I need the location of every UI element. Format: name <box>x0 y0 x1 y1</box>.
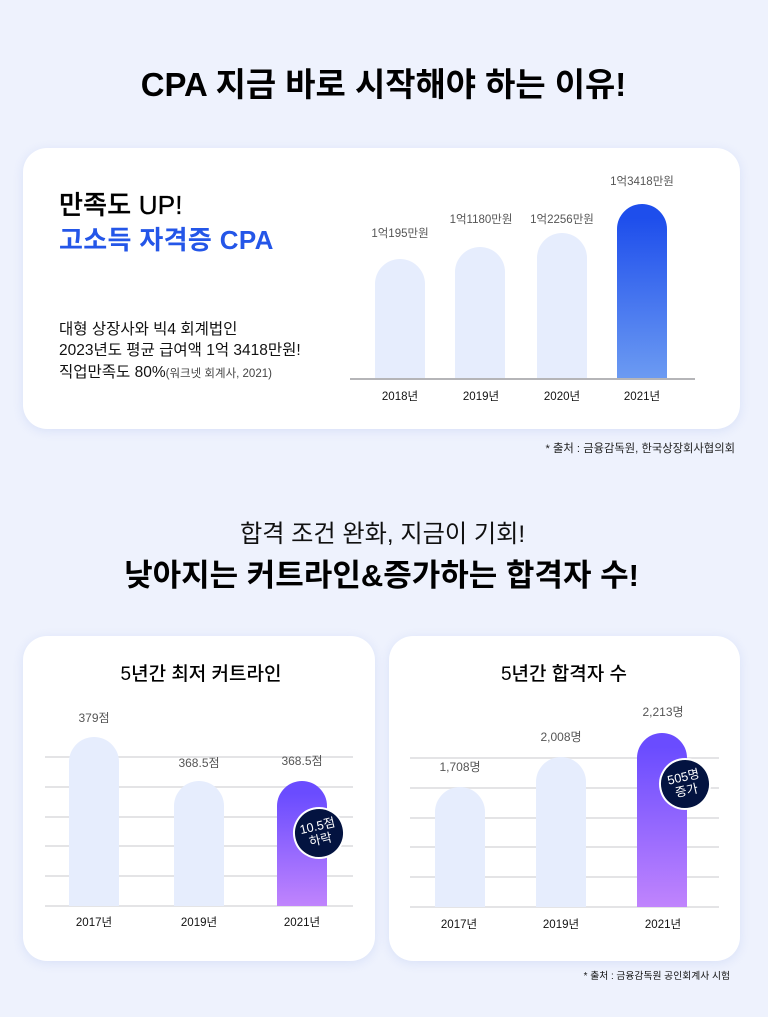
bar 2021 <box>637 733 687 907</box>
bar 2017 <box>69 737 119 906</box>
value 2019: 1억1180만원 <box>450 214 512 226</box>
year 2021: 2021년 <box>645 919 681 931</box>
year 2018: 2018년 <box>382 391 418 403</box>
year 2017: 2017년 <box>441 919 477 931</box>
bar 2018 <box>375 259 425 379</box>
year 2019: 2019년 <box>181 917 217 929</box>
value 2021: 368.5점 <box>281 754 323 768</box>
bar 2019 <box>174 781 224 906</box>
year 2019: 2019년 <box>463 391 499 403</box>
callout: 10.5 point drop <box>288 802 350 864</box>
value 2021: 1억3418만원 <box>610 176 674 188</box>
source note 1: * 출처 : 금융감독원, 한국상장회사협의회 <box>545 443 735 455</box>
section subheading: 합격 조건 완화, 지금이 기회! <box>240 521 525 548</box>
panel heading: 만족도 UP! <box>59 190 183 220</box>
bar 2019 <box>455 247 505 379</box>
value 2017: 1,708명 <box>439 760 481 774</box>
value 2017: 379점 <box>78 711 110 725</box>
bar 2019 <box>536 757 586 907</box>
panel: successful applicants <box>389 636 740 961</box>
source note 2: * 출처 : 금융감독원 공인회계사 시험 <box>584 971 730 982</box>
panel title: 5년간 최저 커트라인 <box>121 664 281 685</box>
bar 2021 <box>617 204 667 379</box>
main title: CPA 지금 바로 시작해야 하는 이유! <box>141 66 626 103</box>
value 2018: 1억195만원 <box>371 228 429 240</box>
description text: 직업만족도 80%(워크넷 회계사, 2021) <box>59 364 272 380</box>
year 2021: 2021년 <box>284 917 320 929</box>
year 2017: 2017년 <box>76 917 112 929</box>
description text <box>59 320 301 380</box>
bar 2021 <box>277 781 327 906</box>
value 2020: 1억2256만원 <box>530 214 594 226</box>
bar 2017 <box>435 787 485 907</box>
year 2020: 2020년 <box>544 391 580 403</box>
callout: 505 increase <box>654 753 716 815</box>
value 2021: 2,213명 <box>642 705 684 719</box>
bar 2020 <box>537 233 587 379</box>
panel: lowest cutline <box>23 636 375 961</box>
description text: 대형 상장사와 빅4 회계법인 <box>59 320 237 338</box>
callout: 505 increase: 505명 <box>666 767 701 788</box>
callout: 10.5 point drop: 하락 <box>308 830 333 849</box>
value 2019: 2,008명 <box>540 730 582 744</box>
year 2019: 2019년 <box>543 919 579 931</box>
bar chart: salary by year <box>350 175 695 403</box>
axis line <box>350 378 695 380</box>
callout: 505 increase: 증가 <box>674 781 699 800</box>
callout: 10.5 point drop: 10.5점 <box>298 815 336 837</box>
section heading: 낮아지는 커트라인&증가하는 합격자 수! <box>124 558 639 593</box>
year 2021: 2021년 <box>624 391 660 403</box>
description text: 2023년도 평균 급여액 1억 3418만원! <box>59 342 301 359</box>
panel: high income CPA <box>23 148 740 429</box>
panel title: 5년간 합격자 수 <box>501 664 627 685</box>
panel heading <box>59 190 274 255</box>
value 2019: 368.5점 <box>178 756 220 770</box>
panel heading: 고소득 자격증 CPA <box>59 225 274 255</box>
